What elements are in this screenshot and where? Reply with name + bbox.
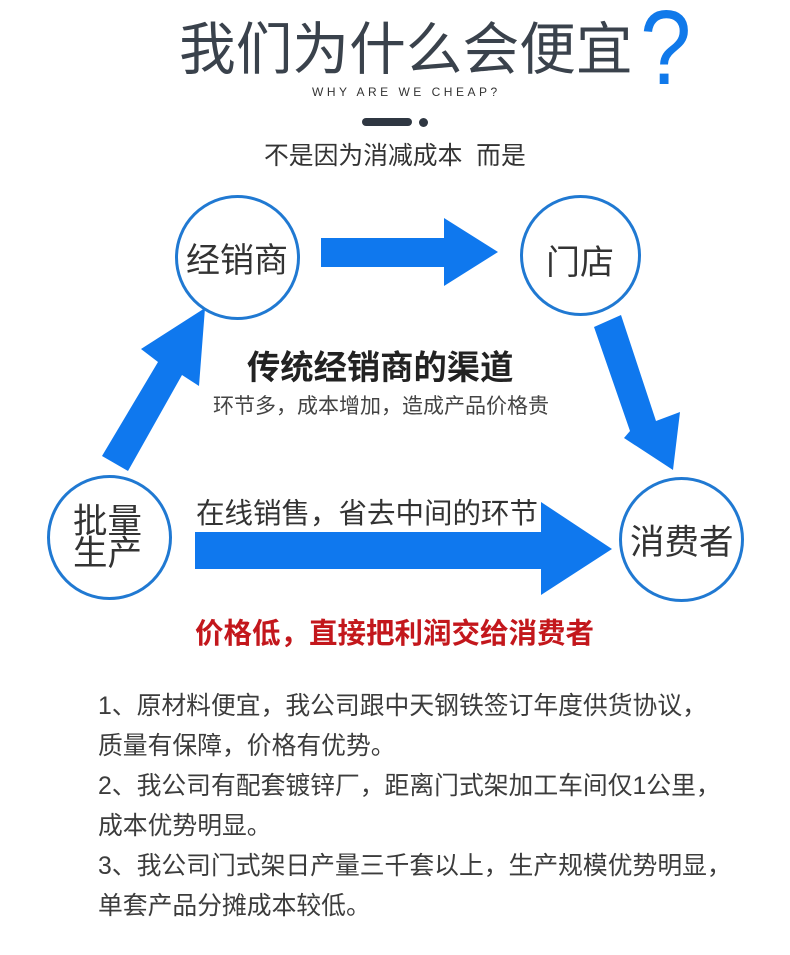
reason 1 (98, 692, 707, 760)
reason 1: 质量有保障，价格有优势。 (98, 733, 396, 760)
arrow: distributor to store (321, 218, 498, 286)
reason 2 (98, 772, 721, 840)
reason 3 (98, 852, 732, 920)
node: store (520, 195, 641, 316)
node: distributor (175, 195, 300, 320)
decorative dash and dot (362, 118, 428, 127)
arrow: factory to consumer (195, 502, 612, 595)
node label: distributor: 经销商 (186, 242, 288, 280)
center subtext: 环节多，成本增加，造成产品价格贵 (213, 395, 549, 418)
reason 2: 2、我公司有配套镀锌厂，距离门式架加工车间仅1公里， (98, 773, 721, 800)
subtitle: WHY ARE WE CHEAP? (312, 85, 501, 99)
arrow caption: 在线销售，省去中间的环节 (196, 498, 538, 530)
red callout: 价格低，直接把利润交给消费者 (195, 618, 594, 650)
intro text: 不是因为消减成本 而是 (264, 143, 526, 170)
arrow: factory to distributor (102, 308, 205, 471)
reason 3: 3、我公司门式架日产量三千套以上，生产规模优势明显， (98, 853, 732, 880)
node label: store: 门店 (546, 244, 614, 282)
numbered reasons (98, 692, 732, 920)
reason 2: 成本优势明显。 (98, 813, 272, 840)
reason 3: 单套产品分摊成本较低。 (98, 893, 371, 920)
node: factory (47, 475, 172, 600)
arrow: store to consumer (594, 315, 680, 470)
node label: factory: 批量生产 (73, 503, 142, 572)
node label: consumer: 消费者 (630, 524, 734, 562)
reason 1: 1、原材料便宜，我公司跟中天钢铁签订年度供货协议， (98, 693, 707, 720)
node: consumer (619, 477, 744, 602)
title: 我们为什么会便宜 (179, 19, 633, 82)
center heading: 传统经销商的渠道 (247, 350, 513, 387)
